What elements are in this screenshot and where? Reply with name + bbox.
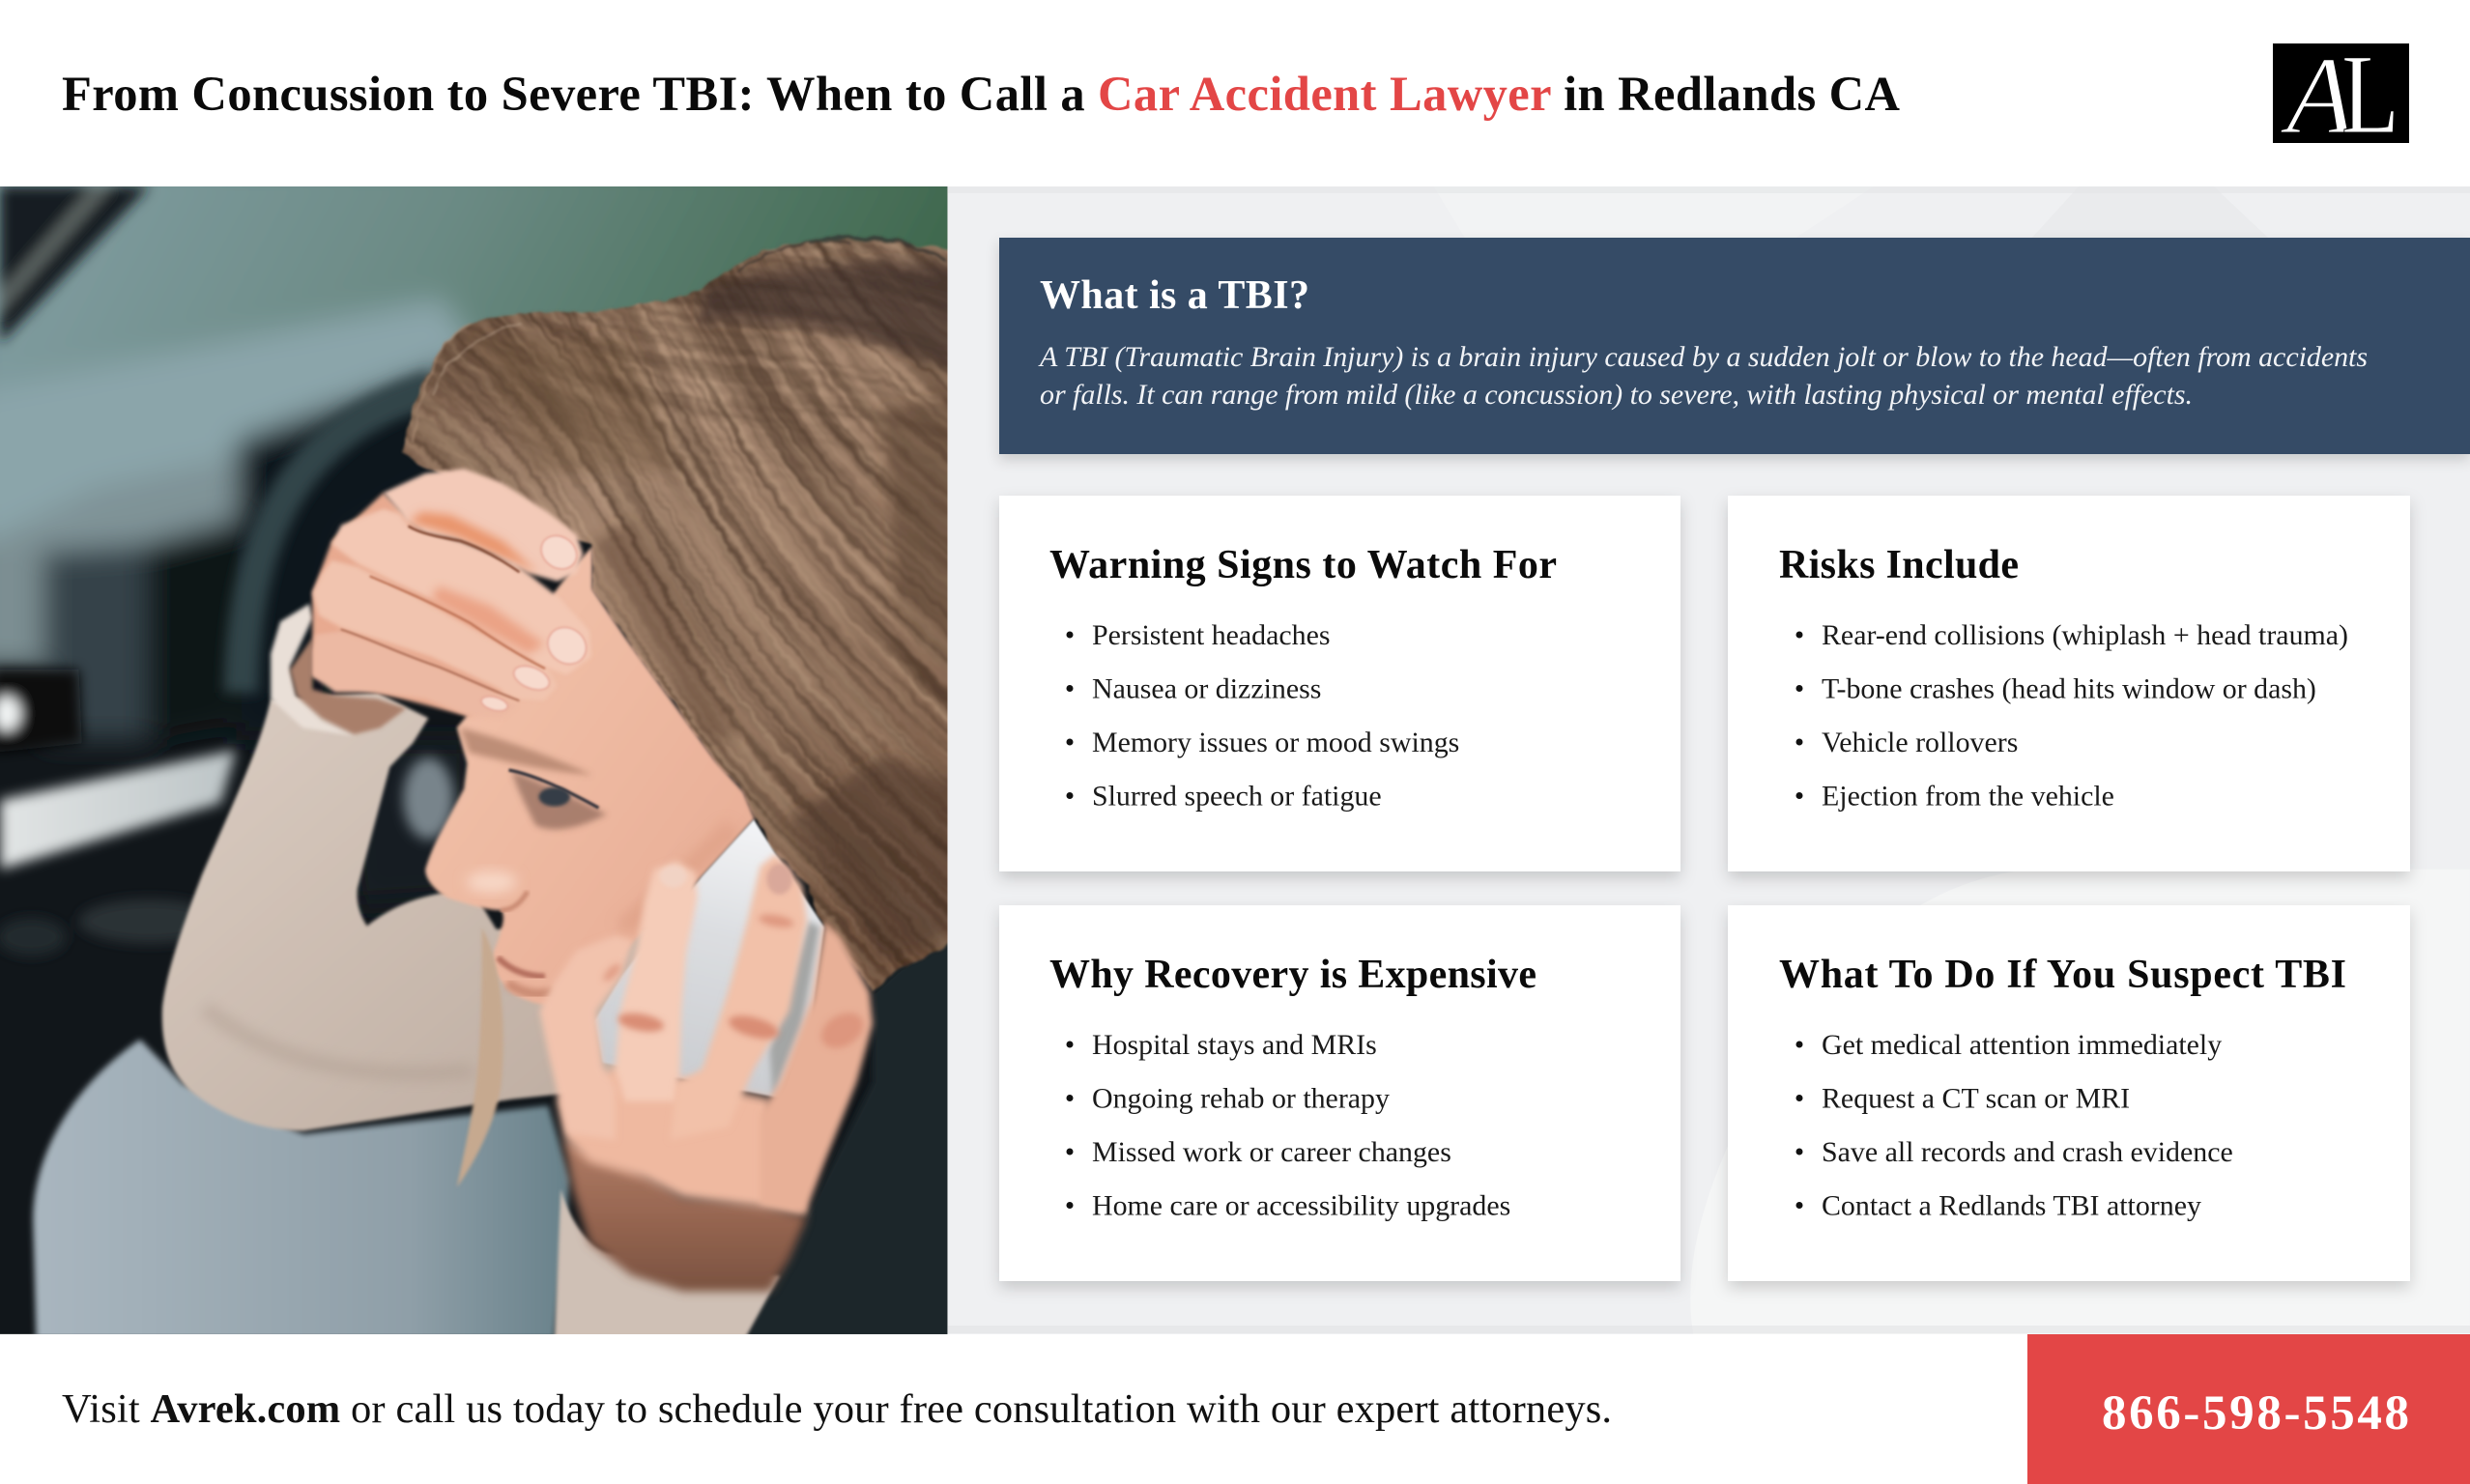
panel definition text bbox=[1038, 341, 2368, 411]
photo: woman on phone holding her head in a car bbox=[0, 186, 947, 1334]
finger three bbox=[312, 560, 558, 700]
finger one on phone bbox=[616, 861, 698, 1101]
index finger bbox=[384, 469, 583, 582]
card list: Rear-end collisions (whiplash + head trauma) bbox=[1822, 619, 2348, 651]
header bar bbox=[0, 0, 2470, 186]
car interior background bbox=[0, 157, 977, 1335]
palm bbox=[558, 1066, 807, 1214]
finger three on phone bbox=[761, 921, 873, 1214]
finger two on phone bbox=[670, 853, 807, 1140]
card list: Persistent headaches bbox=[1092, 619, 1331, 651]
lips bbox=[498, 957, 545, 977]
eyebrow bbox=[460, 728, 592, 775]
card heading: Warning Signs to Watch For bbox=[1049, 543, 1557, 587]
card list: Hospital stays and MRIs bbox=[1092, 1029, 1377, 1061]
nose highlight bbox=[466, 870, 517, 893]
wrist bbox=[290, 638, 406, 734]
knuckle creases bbox=[601, 912, 870, 1055]
finger four bbox=[312, 631, 517, 718]
fingertips bbox=[660, 866, 687, 888]
panel definition text: or falls. It can range from mild (like a concussion) to severe, with lasting physical or mental effects. bbox=[1040, 379, 2193, 411]
card list bbox=[1067, 1029, 1510, 1221]
sweater arm bbox=[162, 693, 670, 1130]
hand base bbox=[312, 493, 554, 717]
card heading: What To Do If You Suspect TBI bbox=[1779, 953, 2346, 997]
finger creases bbox=[341, 527, 544, 700]
hair bbox=[401, 234, 947, 992]
panel: What is a TBI bbox=[999, 238, 2470, 454]
title: From Concussion to Severe TBI: When to Call a Car Accident Lawyer in Redlands CA bbox=[62, 67, 1901, 121]
phone and hand holding it bbox=[539, 819, 873, 1292]
card list bbox=[1795, 1029, 2233, 1221]
card list: Get medical attention immediately bbox=[1822, 1029, 2222, 1061]
card heading: Risks Include bbox=[1779, 543, 2019, 587]
card list: Nausea or dizziness bbox=[1092, 672, 1321, 705]
card list: Ongoing rehab or therapy bbox=[1092, 1082, 1390, 1115]
footer bar bbox=[0, 1334, 2470, 1484]
eye bbox=[508, 770, 607, 829]
card list bbox=[1067, 619, 1459, 812]
panel heading: What is a TBI? bbox=[1040, 273, 1309, 318]
card list: T-bone crashes (head hits window or dash) bbox=[1822, 672, 2316, 705]
card list: Home care or accessibility upgrades bbox=[1092, 1190, 1510, 1221]
panel: textured right background bbox=[948, 186, 2470, 1334]
panel definition text: A TBI (Traumatic Brain Injury) is a brain injury caused by a sudden jolt or blow to the head—often from accidents bbox=[1038, 341, 2368, 373]
finger curled bbox=[539, 935, 633, 1140]
phone bbox=[594, 819, 824, 1099]
logo: A bbox=[2280, 34, 2355, 157]
cheek shade bbox=[622, 827, 732, 929]
leg bbox=[33, 1040, 570, 1342]
call to action text: Visit Avrek.com or call us today to schedule your free consultation with our expert attorneys. bbox=[62, 1386, 1612, 1432]
card list: Missed work or career changes bbox=[1092, 1136, 1451, 1168]
card list: Vehicle rollovers bbox=[1822, 727, 2018, 758]
card list: Memory issues or mood swings bbox=[1092, 727, 1459, 758]
hair strand texture bbox=[0, 0, 1594, 1484]
logo bbox=[2273, 31, 2409, 157]
card: what to do bbox=[1728, 905, 2410, 1281]
phone number box bbox=[2027, 1334, 2470, 1484]
hand on forehead bbox=[271, 469, 593, 736]
face bbox=[425, 547, 755, 1008]
hair strand by the chin bbox=[457, 928, 503, 1187]
fingernails bbox=[479, 528, 593, 713]
door frame dark bbox=[747, 945, 947, 1334]
wrist bbox=[563, 1140, 807, 1292]
sleeve cuff at neck bbox=[555, 1189, 780, 1342]
nostril shadow bbox=[501, 892, 528, 910]
phone number box: 866-598-5548 bbox=[2102, 1386, 2409, 1441]
card: warning signs bbox=[999, 496, 1680, 871]
card list: Save all records and crash evidence bbox=[1822, 1136, 2233, 1168]
card: why recovery is expensive bbox=[999, 905, 1680, 1281]
card list: Slurred speech or fatigue bbox=[1092, 781, 1382, 812]
logo: L bbox=[2341, 31, 2399, 157]
steering wheel bbox=[241, 387, 433, 693]
card list: Contact a Redlands TBI attorney bbox=[1822, 1190, 2201, 1221]
finger two bbox=[331, 509, 591, 674]
card list bbox=[1795, 619, 2348, 812]
card list: Request a CT scan or MRI bbox=[1822, 1082, 2130, 1115]
card: risks include bbox=[1728, 496, 2410, 871]
wrist cuff bbox=[271, 604, 355, 736]
card heading: Why Recovery is Expensive bbox=[1049, 953, 1537, 997]
card list: Ejection from the vehicle bbox=[1822, 781, 2114, 812]
